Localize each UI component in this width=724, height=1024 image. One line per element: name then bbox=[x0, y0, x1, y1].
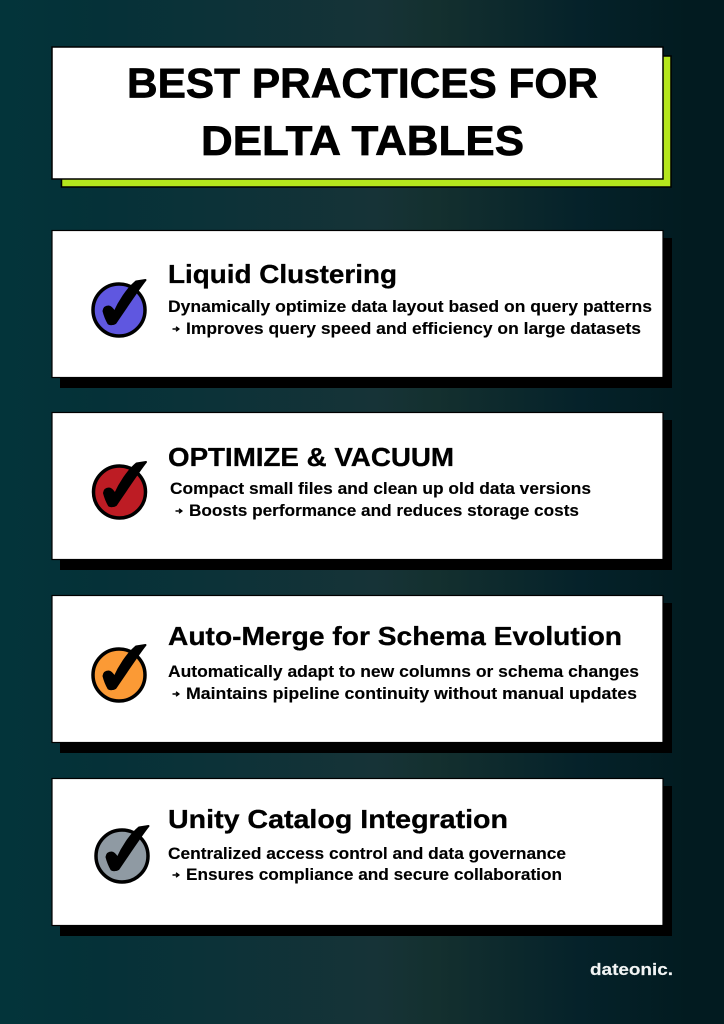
panel: OPTIMIZE & VACUUM bbox=[52, 412, 672, 570]
panel: Auto-Merge bbox=[52, 596, 672, 753]
benefit: Improves query speed and efficiency on large datasets bbox=[186, 320, 641, 338]
icon: red check bbox=[94, 462, 146, 518]
card bbox=[52, 596, 663, 742]
card bbox=[52, 778, 663, 926]
title line 1: BEST PRACTICES FOR bbox=[127, 60, 598, 106]
description: Dynamically optimize data layout based on query patterns bbox=[168, 298, 652, 316]
heading: Liquid Clustering bbox=[168, 259, 397, 289]
benefit arrow bbox=[172, 873, 179, 877]
card shadow bbox=[60, 786, 672, 936]
icon: orange check bbox=[93, 645, 146, 701]
logo: dateonic: dateonic. bbox=[590, 960, 673, 979]
description: Compact small files and clean up old data versions bbox=[170, 480, 591, 498]
title line 2: DELTA TABLES bbox=[201, 117, 524, 164]
benefit arrow bbox=[176, 509, 182, 513]
benefit: Maintains pipeline continuity without manual updates bbox=[186, 685, 637, 703]
benefit arrow bbox=[172, 327, 179, 331]
description: Centralized access control and data governance bbox=[168, 845, 566, 863]
panel: Liquid Clustering bbox=[52, 230, 672, 388]
icon: grey check bbox=[96, 826, 148, 882]
heading: Auto-Merge for Schema Evolution bbox=[168, 621, 622, 651]
description: Automatically adapt to new columns or schema changes bbox=[168, 663, 639, 681]
icon: purple check bbox=[93, 280, 146, 336]
heading: Unity Catalog Integration bbox=[168, 804, 508, 834]
title banner bbox=[52, 47, 671, 187]
banner lime shadow bbox=[62, 56, 671, 187]
card bbox=[52, 230, 663, 378]
card shadow bbox=[60, 420, 672, 570]
card shadow bbox=[60, 603, 672, 753]
panel: Unity Catalog bbox=[52, 778, 672, 936]
benefit: Boosts performance and reduces storage costs bbox=[189, 502, 579, 520]
benefit: Ensures compliance and secure collaboration bbox=[186, 866, 562, 884]
card bbox=[52, 412, 663, 560]
heading: OPTIMIZE & VACUUM bbox=[168, 442, 454, 472]
benefit arrow bbox=[172, 692, 179, 696]
banner panel bbox=[52, 47, 663, 179]
card shadow bbox=[60, 238, 672, 388]
